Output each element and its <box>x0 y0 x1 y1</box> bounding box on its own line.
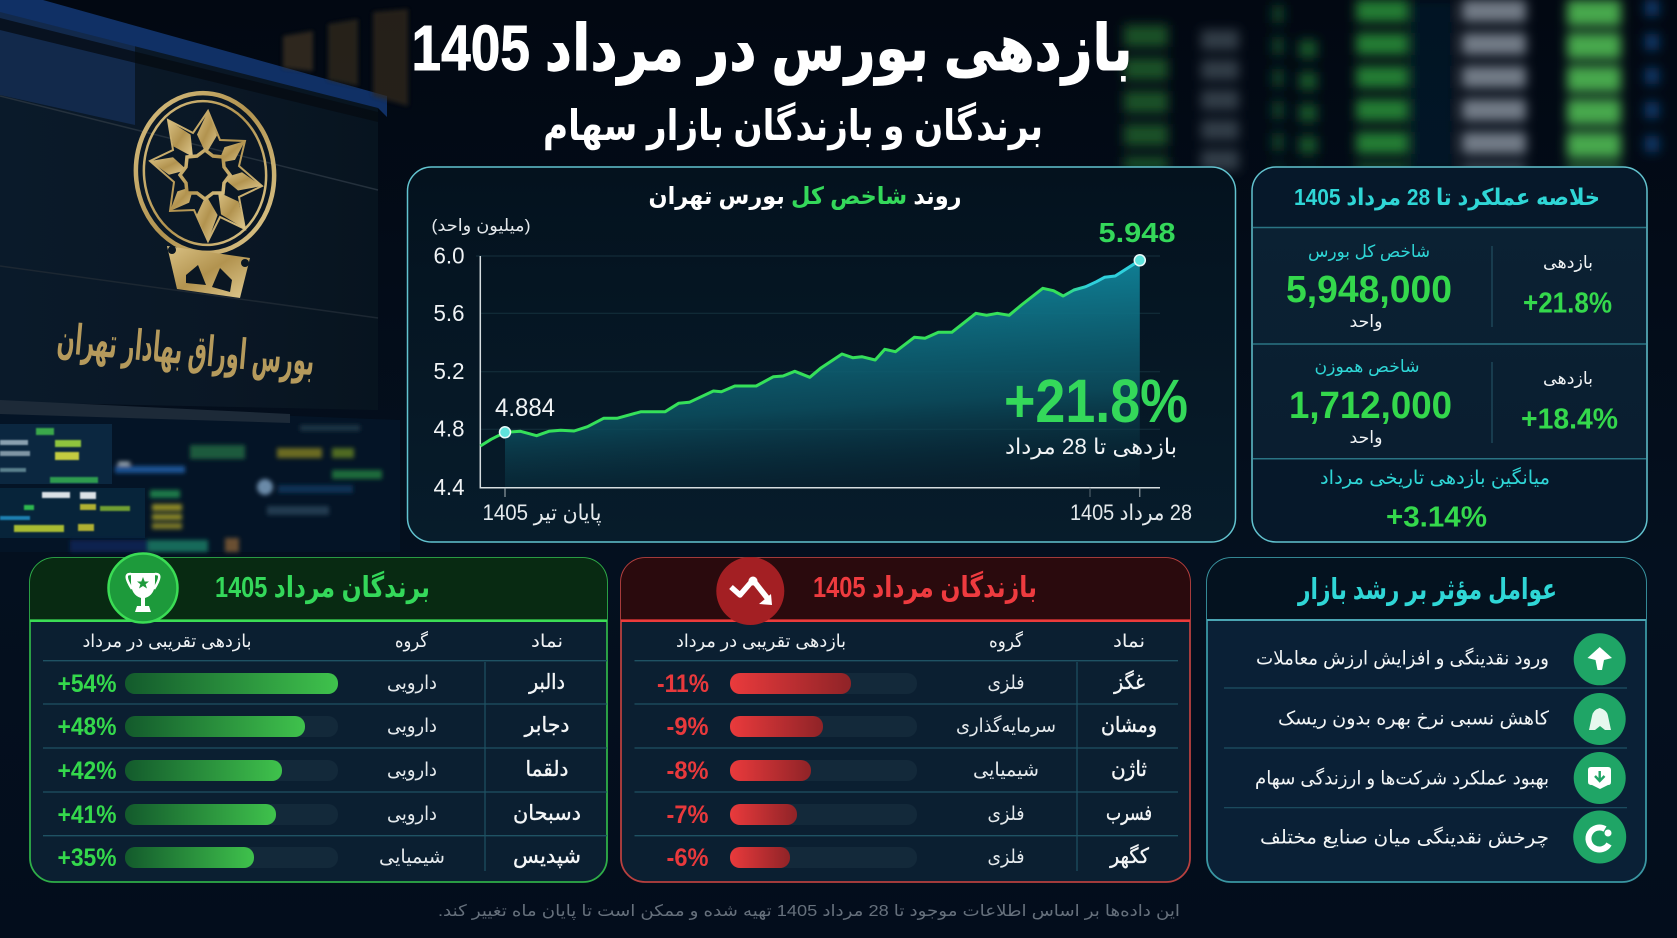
row: DALBER: دالبر <box>528 671 565 694</box>
start value: 4.884 <box>495 394 555 422</box>
row: DJABER <box>58 713 570 741</box>
winners table: نماد <box>531 631 563 651</box>
panel: growth factors <box>1207 558 1646 882</box>
total index card: واحد <box>1350 312 1382 331</box>
row: KEGOHAR <box>666 844 1149 872</box>
factor: company performance <box>1255 752 1626 804</box>
chart heading: روند شاخص کل بورس تهران <box>648 183 962 210</box>
row: FASROB <box>666 801 1152 829</box>
factor: liquidity: ورود نقدینگی و افزایش ارزش معاملات <box>1256 646 1549 670</box>
unit label: (میلیون واحد) <box>432 216 530 235</box>
y axis labels <box>434 242 465 500</box>
icon: falling trend <box>716 557 784 625</box>
losers table: بازدهی تقریبی در مرداد <box>676 631 846 652</box>
row: GHEGAZ: فلزی <box>988 673 1024 694</box>
equal weight index card <box>1289 357 1618 447</box>
factor: interest rate: کاهش نسبی نرخ بهره بدون ریسک <box>1278 708 1550 730</box>
row: FASROB: فسرب <box>1106 802 1152 825</box>
total index card: +21.8% <box>1523 288 1612 320</box>
row: VAMESHAN <box>666 713 1157 741</box>
row: DSOBHAN <box>58 801 581 829</box>
total index card: 5,948,000 <box>1286 269 1452 311</box>
row: KEGOHAR: کگهر <box>1109 844 1149 868</box>
panel: performance summary <box>1252 167 1647 542</box>
footer note: این داده‌ها بر اساس اطلاعات موجود تا 28 مرداد 1405 تهیه شده و ممکن است تا پایان ماه تغییر کند. <box>438 903 1180 921</box>
title: بازدهی بورس در مرداد 1405 <box>411 12 1132 86</box>
row: SASAZHEN: -8% <box>666 757 708 785</box>
row: KEGOHAR: فلزی <box>988 847 1024 868</box>
row: FASROB: -7% <box>666 801 708 829</box>
losers table: گروه <box>989 630 1023 652</box>
row: SASAZHEN: ثاژن <box>1111 758 1147 781</box>
building facade <box>0 0 408 410</box>
row: SHAPDIS: شیمیایی <box>379 847 445 868</box>
winners table: گروه <box>395 630 428 652</box>
factor: sector rotation: چرخش نقدینگی میان صنایع مختلف <box>1260 826 1549 848</box>
historical average: +3.14% <box>1386 502 1487 534</box>
winners heading: برندگان مرداد 1405 <box>215 570 430 604</box>
row: DALBER <box>58 670 565 698</box>
row: FASROB: فلزی <box>988 804 1024 825</box>
winners table: بازدهی تقریبی در مرداد <box>82 631 252 652</box>
y axis labels: 4.4 <box>434 474 465 500</box>
subtitle: برندگان و بازندگان بازار سهام <box>543 101 1043 151</box>
losers table <box>634 630 1178 872</box>
historical average: میانگین بازدهی تاریخی مرداد <box>1320 466 1550 489</box>
row: DJABER: دارویی <box>387 716 437 737</box>
row: SASAZHEN: شیمیایی <box>973 760 1039 781</box>
row: DSOBHAN: دارویی <box>387 804 437 825</box>
row: DALGHAMA: +42% <box>58 757 116 785</box>
row: KEGOHAR: -6% <box>666 844 708 872</box>
y axis labels: 5.6 <box>434 300 464 326</box>
row: DALBER: دارویی <box>387 673 437 694</box>
row: VAMESHAN: ومشان <box>1101 714 1157 737</box>
logo wordmark: بورس اوراق بهادار تهران <box>55 315 317 386</box>
factor: interest rate <box>1278 693 1626 745</box>
equal weight index card: شاخص هموزن <box>1314 357 1420 376</box>
line chart <box>476 255 1160 497</box>
row: DSOBHAN: +41% <box>58 801 116 829</box>
return callout: +21.8% <box>1004 367 1188 435</box>
losers table: نماد <box>1113 631 1145 651</box>
row: SASAZHEN <box>666 757 1147 785</box>
total index card: شاخص کل بورس <box>1308 242 1430 261</box>
row: VAMESHAN: سرمایه‌گذاری <box>956 714 1056 737</box>
winners table <box>43 630 607 872</box>
x label start: پایان تیر 1405 <box>483 500 602 526</box>
end value: 5.948 <box>1098 217 1176 248</box>
y axis labels: 5.2 <box>434 358 464 384</box>
total index card: بازدهی <box>1543 253 1593 272</box>
row: SHAPDIS: +35% <box>58 844 116 872</box>
panel: index trend chart <box>408 167 1236 542</box>
losers heading: بازندگان مرداد 1405 <box>813 570 1037 604</box>
y axis labels: 4.8 <box>434 416 464 442</box>
panel: winners <box>30 554 607 882</box>
row: SHAPDIS <box>58 844 581 872</box>
row: DSOBHAN: دسبحان <box>513 802 581 825</box>
exchange logo <box>128 86 282 298</box>
factors heading: عوامل مؤثر بر رشد بازار <box>1296 574 1557 606</box>
row: DALBER: +54% <box>58 670 116 698</box>
factor: sector rotation <box>1260 810 1626 864</box>
row: DJABER: دجابر <box>524 714 570 737</box>
x label end: 28 مرداد 1405 <box>1070 500 1192 525</box>
y axis labels: 6.0 <box>434 242 464 268</box>
row: DALGHAMA <box>58 757 568 785</box>
row: GHEGAZ <box>657 670 1145 698</box>
row: GHEGAZ: غگز <box>1113 670 1145 694</box>
row: VAMESHAN: -9% <box>666 713 708 741</box>
equal weight index card: 1,712,000 <box>1289 385 1452 427</box>
equal weight index card: بازدهی <box>1543 369 1593 388</box>
total index card <box>1286 242 1612 331</box>
icon: trophy <box>108 554 178 622</box>
equal weight index card: +18.4% <box>1521 404 1618 436</box>
row: DALGHAMA: دلقما <box>526 758 568 781</box>
return caption: بازدهی تا 28 مرداد <box>1005 434 1177 459</box>
equal weight index card: واحد <box>1350 428 1382 447</box>
factor: liquidity <box>1256 633 1626 685</box>
lobby ticker screens <box>0 400 400 552</box>
summary heading: خلاصه عملکرد تا 28 مرداد 1405 <box>1294 184 1600 211</box>
wall ticker columns <box>1146 0 1652 170</box>
panel: losers <box>621 557 1190 882</box>
row: GHEGAZ: -11% <box>657 670 709 698</box>
row: DJABER: +48% <box>58 713 116 741</box>
row: SHAPDIS: شپدیس <box>513 845 581 868</box>
factor: company performance: بهبود عملکرد شرکت‌ها و ارزندگی سهام <box>1255 766 1549 790</box>
historical average <box>1320 466 1550 534</box>
row: DALGHAMA: دارویی <box>387 760 437 781</box>
